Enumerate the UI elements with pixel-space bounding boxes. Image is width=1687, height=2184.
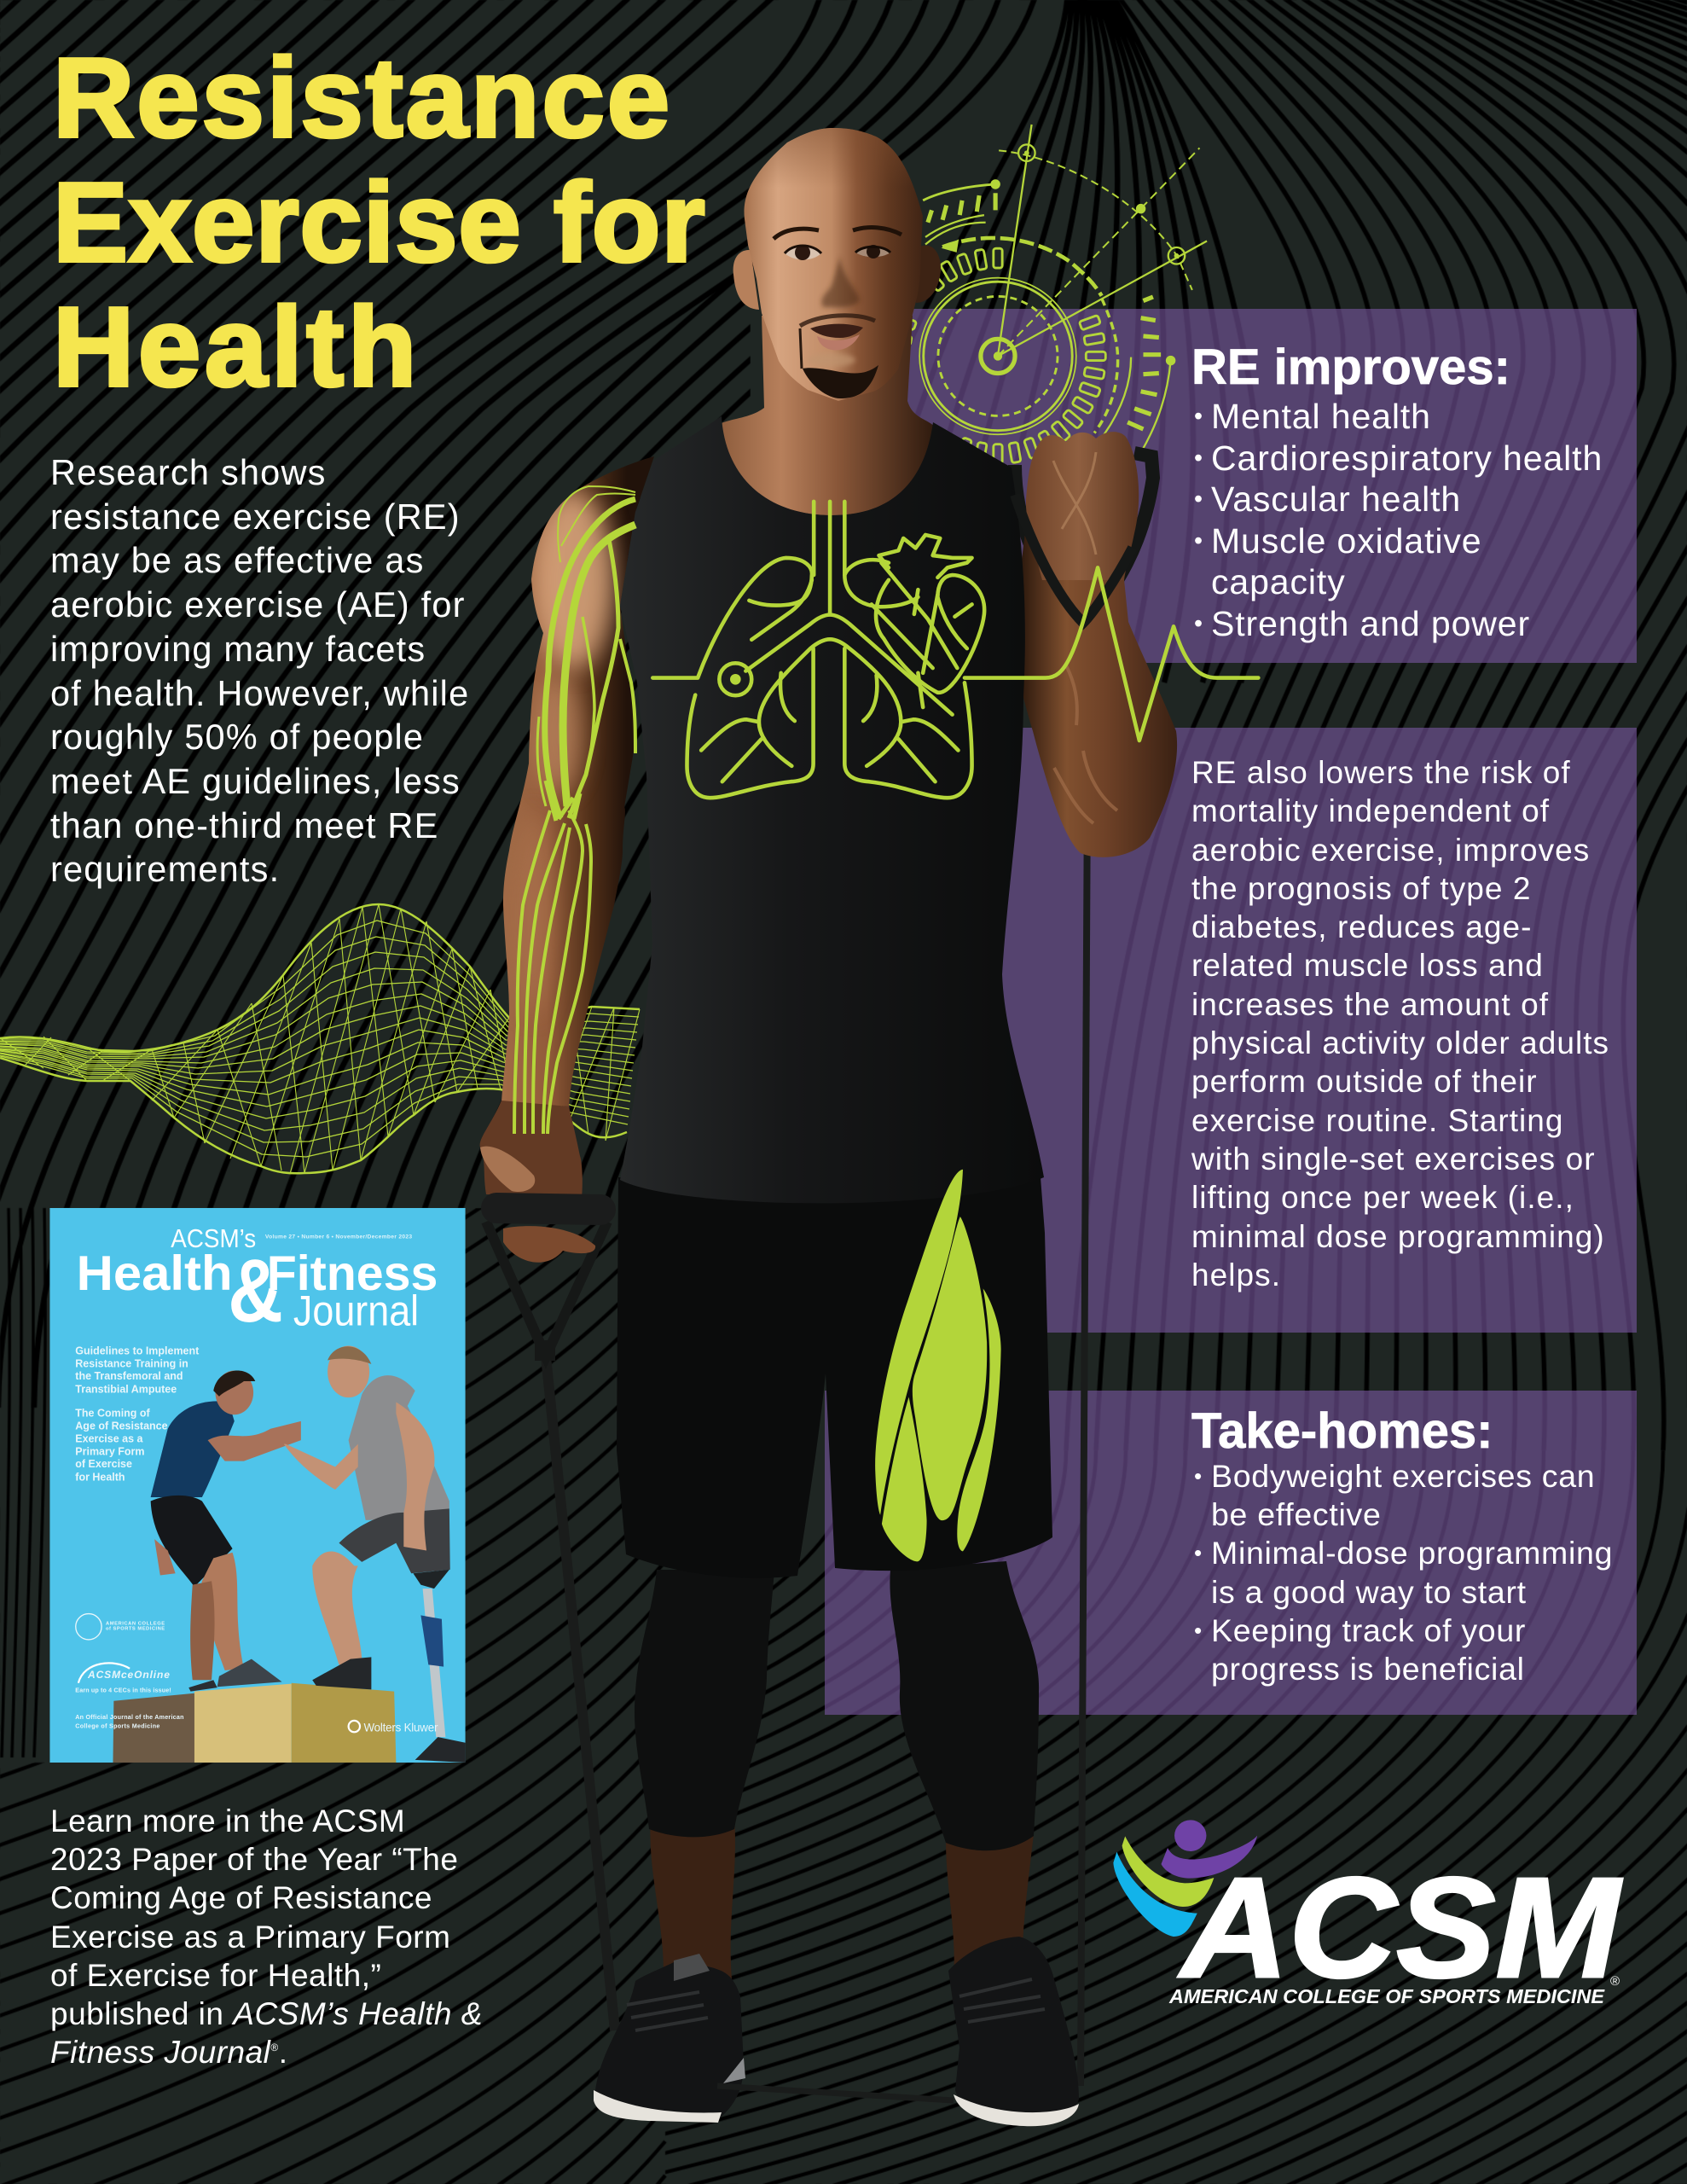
list: take-homes [1194,1458,1613,1687]
cover society logos and footers: An Official Journal of the American [75,1714,183,1721]
list: RE benefits: • [1194,444,1203,472]
cover headlines: Guidelines to Implement [75,1345,199,1356]
cover athlete: right man [284,1345,466,1763]
cover masthead: Health [77,1246,233,1301]
title: Exercise for [53,160,705,285]
intro text: of health. However, while [50,673,469,713]
intro text: resistance exercise (RE) [50,497,461,537]
cover headlines: Age of Resistance [75,1420,168,1432]
list: take-homes: • [1194,1463,1203,1489]
tank top [620,416,1044,1203]
nose shading [821,256,860,307]
intro text: roughly 50% of people [50,717,424,757]
cover society logos and footers: ACSMceOnline [87,1669,170,1681]
cover headlines: Resistance Training in [75,1357,188,1369]
cover society logos and footers: AMERICAN COLLEGE [106,1622,165,1627]
body text: RE also lowers risk: minimal dose programming) [1191,1219,1605,1254]
cover masthead: Fitness [267,1246,438,1301]
left arm highlights [514,491,614,1015]
right arm [1015,512,1177,857]
call to action text [50,1804,483,2070]
list: take-homes: Bodyweight exercises can [1211,1458,1595,1494]
right band loop back [1015,453,1153,623]
quadriceps muscle [875,1170,1001,1561]
intro text: than one-third meet RE [50,805,438,845]
left band handle [486,1208,607,1360]
intro text: Research shows [50,452,327,492]
mouth and goatee [800,316,878,398]
list: RE benefits: Cardiorespiratory health [1211,439,1603,478]
cover masthead: ACSM’s [171,1225,256,1253]
intro text: requirements. [50,849,280,889]
list: RE benefits: Vascular health [1211,479,1461,519]
right ear [916,246,941,303]
call to action text: 2023 Paper of the Year “The [50,1842,458,1877]
list: RE benefits: • [1194,485,1203,513]
left ear [733,250,759,310]
cover headlines: of Exercise [75,1458,132,1470]
intro text: meet AE guidelines, less [50,761,461,801]
logo wordmark: ACSM [1178,1849,1623,2007]
left fingers [503,1226,595,1263]
cover headlines: the Transfemoral and [75,1370,183,1382]
head [745,128,923,401]
body text: RE also lowers risk: physical activity older adults [1191,1025,1609,1060]
lungs [652,502,972,798]
logo subtitle: AMERICAN COLLEGE OF SPORTS MEDICINE [1168,1985,1605,2007]
title: Resistance [53,35,672,160]
band: bottom strand [717,2086,954,2100]
list: take-homes: Keeping track of your [1211,1612,1526,1648]
forearm veins [1054,665,1117,823]
cover society logos and footers: Wolters Kluwer [363,1721,438,1734]
heading: RE improves: RE improves: [1191,340,1510,395]
right fist [1026,432,1139,580]
list: RE benefits: • [1194,610,1203,637]
right shoe [948,1937,1079,2126]
cover society logos and footers: College of Sports Medicine [75,1722,159,1729]
journal cover [49,1208,466,1763]
logo figure [1113,1820,1257,1937]
body text: RE also lowers risk: the prognosis of type 2 [1191,871,1532,906]
body text: RE also lowers risk: related muscle loss and [1191,948,1544,983]
cover society logos and footers: of SPORTS MEDICINE [106,1626,165,1631]
title: Health [53,284,420,410]
cover masthead [77,1225,438,1341]
cover masthead: Volume 27 • Number 6 • November/December 2023 [265,1234,412,1240]
tights left [635,1570,774,1837]
call to action text: published in ACSM’s Health & [50,1996,483,2031]
left arm [501,456,654,1107]
heading: Take-homes: Take-homes: [1191,1403,1493,1459]
list: take-homes: • [1194,1618,1203,1643]
body text: RE also lowers risk: exercise routine. Starting [1191,1103,1564,1138]
ECG line [965,567,1258,741]
list: take-homes: is a good way to start [1211,1574,1527,1610]
list: RE benefits: • [1194,527,1203,555]
cover headlines [75,1345,199,1483]
list: RE benefits: Muscle oxidative [1211,521,1481,561]
body text: RE also lowers risk: helps. [1191,1258,1281,1292]
cover athlete: left man [151,1370,301,1692]
cover masthead: & [228,1241,283,1341]
band: right strand [1081,623,1088,2086]
cover headlines: Transtibial Amputee [75,1383,177,1395]
intro text: improving many facets [50,629,426,669]
list: take-homes: Minimal-dose programming [1211,1535,1613,1571]
cover box [113,1683,396,1763]
call to action text: Fitness Journal®. [50,2035,288,2070]
shorts [617,1177,1052,1578]
left shoe [594,1954,745,2123]
brows and eyes [774,228,901,260]
cover society logos and footers [75,1614,438,1734]
body text: RE also lowers risk: increases the amount of [1191,987,1549,1022]
list: take-homes: progress is beneficial [1211,1651,1525,1687]
figure: man with resistance band [479,128,1177,2126]
cover headlines: for Health [75,1471,125,1483]
list: RE benefits: capacity [1211,562,1346,601]
intro text: may be as effective as [50,540,425,580]
panel: RE improves [906,309,1637,663]
right calf [946,1834,1034,1979]
cover headlines: The Coming of [75,1407,151,1419]
tights right [890,1561,1039,1850]
intro text [50,452,469,889]
band wrist strap [1015,495,1133,623]
neck and chest [722,316,935,515]
left thumb [480,1147,535,1192]
list: RE benefits: • [1194,403,1203,430]
body text: RE also lowers risk: diabetes, reduces age- [1191,909,1533,944]
intro text: aerobic exercise (AE) for [50,584,466,624]
cover headlines: Primary Form [75,1446,144,1458]
body text: RE also lowers risk: lifting once per week (i.e., [1191,1180,1574,1215]
body text: RE also lowers risk: perform outside of their [1191,1064,1538,1099]
head top shading [745,128,923,247]
call to action text: Exercise as a Primary Form [50,1920,450,1955]
band: left strand [546,1356,615,2030]
call to action text: Learn more in the ACSM [50,1804,405,1838]
list: take-homes: • [1194,1540,1203,1565]
body text: RE also lowers risk: with single-set exercises or [1191,1141,1596,1176]
cover society logos and footers: Earn up to 4 CECs in this issue! [75,1687,171,1693]
body text: RE also lowers risk: RE also lowers the risk of [1191,755,1571,790]
cover masthead: Journal [293,1287,419,1334]
call to action text: Coming Age of Resistance [50,1880,432,1915]
body text: RE also lowers risk: aerobic exercise, improves [1191,833,1590,868]
list: take-homes: be effective [1211,1496,1382,1532]
body text: RE also lowers risk: mortality independent of [1191,793,1550,828]
left calf [650,1817,735,1996]
panel: Take-homes [825,1391,1637,1715]
list: RE benefits: Strength and power [1211,604,1530,643]
title [53,35,705,410]
arm muscle lines [514,486,635,1134]
left hand [480,1101,583,1199]
body text: RE also lowers risk [1191,755,1609,1292]
cover headlines: Exercise as a [75,1432,144,1444]
list: RE benefits: Mental health [1211,397,1431,436]
heart [872,535,984,707]
fist veins [1053,452,1096,555]
registered mark: ® [1610,1974,1620,1989]
call to action text: of Exercise for Health,” [50,1958,381,1993]
list: RE benefits [1194,397,1603,643]
panel: RE also lowers risk [995,728,1637,1333]
